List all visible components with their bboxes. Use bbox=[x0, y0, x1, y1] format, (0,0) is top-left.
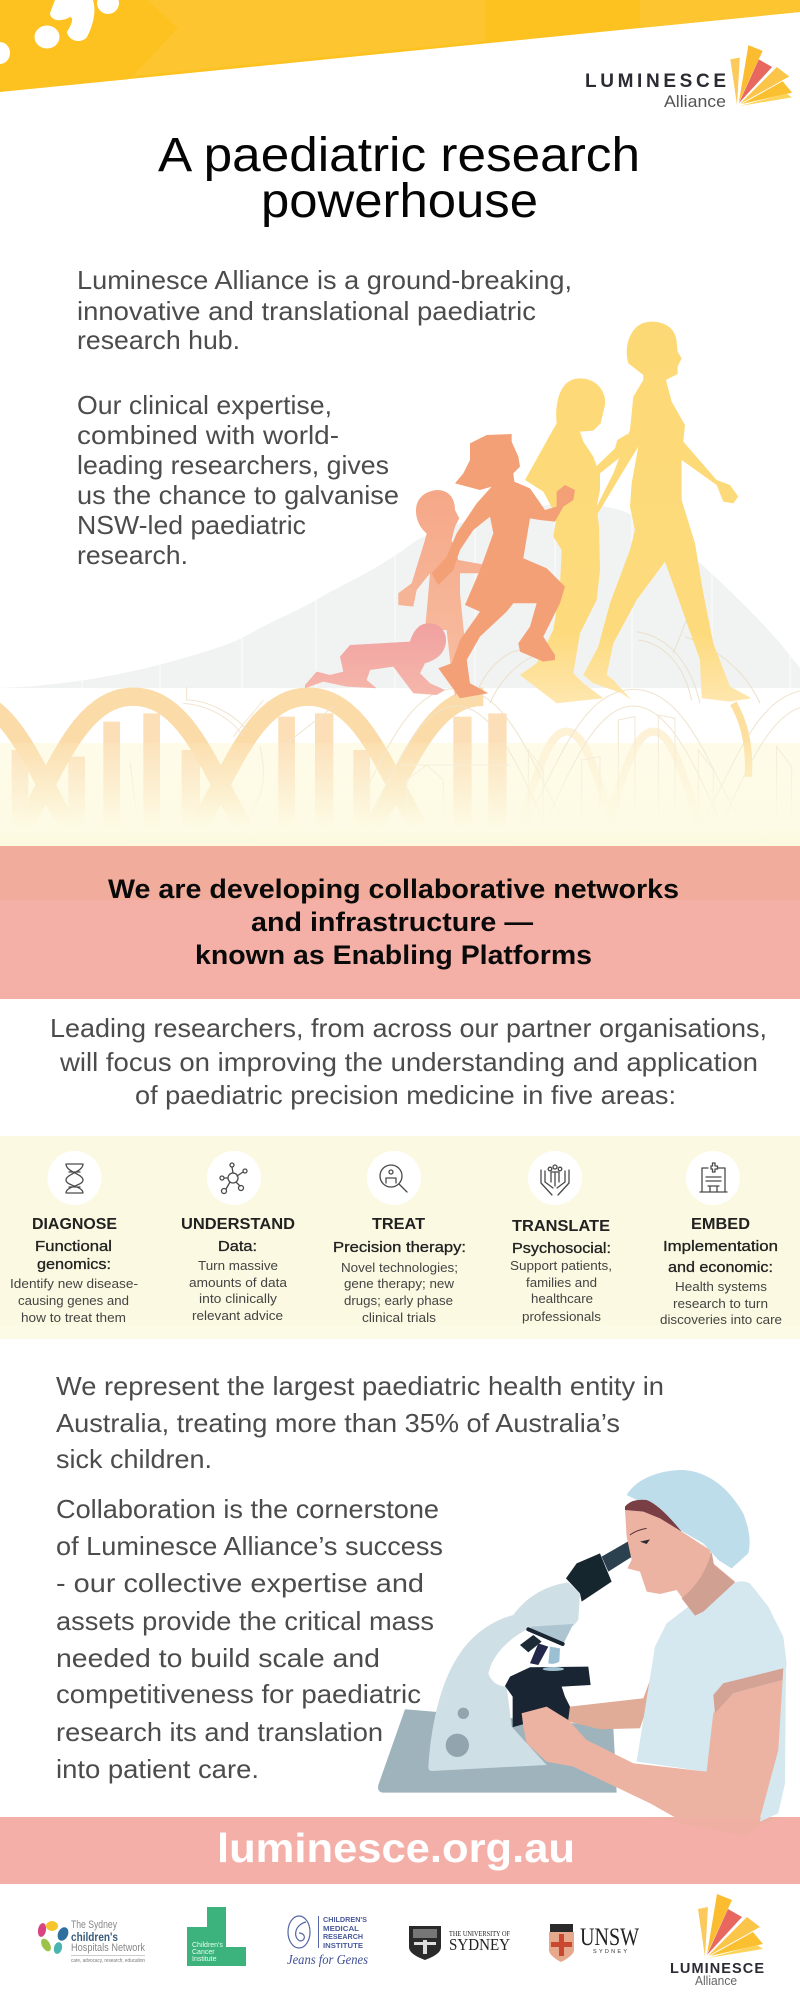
logo: Luminesce Alliance header: Alliance bbox=[664, 92, 726, 111]
panel: five areas bbox=[0, 1136, 800, 1339]
text block: collaboration: of Luminesce Alliance’s success bbox=[56, 1531, 443, 1561]
logo: Children's Medical Research Institute: MEDICAL bbox=[323, 1924, 359, 1933]
column: diagnose: how to treat them bbox=[21, 1311, 126, 1325]
column: treat bbox=[333, 1151, 466, 1325]
icon: hospital bbox=[700, 1163, 727, 1192]
logo: Children's Medical Research Institute: INSTITUTE bbox=[323, 1941, 363, 1950]
grey bell curve bbox=[0, 500, 800, 688]
column: embed: EMBED bbox=[691, 1216, 750, 1233]
logo: Children's Medical Research Institute: CHILDREN'S bbox=[323, 1915, 367, 1924]
column: diagnose: Identify new disease- bbox=[10, 1277, 138, 1291]
column: understand: amounts of data bbox=[189, 1276, 287, 1290]
panel: enabling platforms heading bbox=[0, 846, 800, 999]
text block: largest paediatric entity bbox=[56, 1371, 664, 1474]
text block: intro paragraph: Luminesce Alliance is a ground-breaking, bbox=[77, 265, 572, 295]
logo: Sydney Children's Hospitals Network: children's bbox=[71, 1930, 118, 1944]
column: translate: Psychosocial: bbox=[512, 1241, 611, 1257]
column: translate: professionals bbox=[522, 1310, 601, 1324]
column: treat: drugs; early phase bbox=[344, 1294, 453, 1308]
logo: Children's Cancer Institute: Institute bbox=[192, 1956, 217, 1963]
text block: largest paediatric entity: Australia, treating more than 35% of Australia’s bbox=[56, 1408, 620, 1438]
logo: University of Sydney bbox=[409, 1926, 510, 1960]
logo: Children's Cancer Institute: Cancer bbox=[192, 1949, 215, 1956]
column: diagnose: DIAGNOSE bbox=[32, 1216, 117, 1233]
column: treat: TREAT bbox=[372, 1216, 425, 1233]
head bbox=[625, 1510, 735, 1616]
text block: clinical expertise: combined with world- bbox=[77, 420, 339, 450]
figure: small child bbox=[398, 490, 495, 697]
logo: Sydney Children's Hospitals Network bbox=[37, 1919, 145, 1964]
column: diagnose: causing genes and bbox=[18, 1294, 129, 1308]
text block: clinical expertise: Our clinical expertise, bbox=[77, 390, 332, 420]
heading text: We are developing collaborative networks bbox=[108, 874, 679, 904]
text block: collaboration: Collaboration is the cornerstone bbox=[56, 1494, 439, 1524]
column: understand: relevant advice bbox=[192, 1309, 283, 1323]
figure: crawling baby bbox=[305, 623, 446, 695]
column: embed: discoveries into care bbox=[660, 1313, 782, 1327]
logo: Sydney Children's Hospitals Network: Hospitals Network bbox=[71, 1942, 145, 1954]
text block: clinical expertise: leading researchers, gives bbox=[77, 450, 389, 480]
top banner bbox=[0, 0, 800, 92]
icon: network bbox=[220, 1163, 247, 1194]
illustration: helix background and figures bbox=[0, 322, 800, 846]
shirt bbox=[637, 1581, 787, 1773]
heading text: and infrastructure — bbox=[251, 907, 533, 937]
column: translate: healthcare bbox=[531, 1292, 593, 1306]
icon: hands and people bbox=[541, 1165, 569, 1195]
text block: collaboration: needed to build scale and bbox=[56, 1643, 380, 1673]
logo: UNSW Sydney: UNSW bbox=[580, 1924, 639, 1951]
column: treat: Novel technologies; bbox=[341, 1261, 458, 1275]
text block: leading researchers bbox=[50, 1013, 767, 1110]
column: embed bbox=[660, 1151, 782, 1327]
title bbox=[158, 129, 640, 228]
logo: Luminesce Alliance footer: LUMINESCE bbox=[670, 1961, 764, 1977]
DNA helix bbox=[0, 687, 507, 827]
heading text bbox=[108, 874, 679, 970]
column: understand: UNDERSTAND bbox=[181, 1216, 295, 1233]
column: embed: Implementation bbox=[663, 1239, 778, 1255]
column: embed: research to turn bbox=[673, 1297, 768, 1311]
microscope body bbox=[428, 1539, 640, 1771]
logo: Children's Medical Research Institute: Jeans for Genes bbox=[287, 1953, 368, 1968]
text block: largest paediatric entity: sick children. bbox=[56, 1444, 212, 1474]
icon: magnifier bbox=[380, 1165, 407, 1192]
far arm bbox=[568, 1667, 655, 1729]
column: treat: Precision therapy: bbox=[333, 1240, 466, 1256]
icon: DNA bbox=[66, 1164, 83, 1193]
column: understand: Data: bbox=[218, 1239, 257, 1255]
logo: University of Sydney: THE UNIVERSITY OF bbox=[449, 1929, 510, 1938]
logo: Luminesce Alliance header bbox=[585, 45, 792, 111]
text block: collaboration bbox=[56, 1494, 443, 1784]
logo: Children's Cancer Institute bbox=[187, 1907, 246, 1966]
logo: Luminesce Alliance footer bbox=[670, 1894, 764, 1988]
logo: UNSW Sydney: SYDNEY bbox=[593, 1949, 627, 1955]
text block: intro paragraph: research hub. bbox=[77, 325, 240, 355]
text block: leading researchers: Leading researchers, from across our partner organisations, bbox=[50, 1013, 767, 1043]
column: understand: Turn massive bbox=[198, 1259, 278, 1273]
column: treat: clinical trials bbox=[362, 1311, 436, 1325]
thin helix outlines bbox=[347, 688, 800, 827]
text block: collaboration: research its and translation bbox=[56, 1717, 383, 1747]
shirt back bbox=[760, 1663, 786, 1822]
logo: Sydney Children's Hospitals Network: The Sydney bbox=[71, 1919, 117, 1931]
text block: clinical expertise: research. bbox=[77, 540, 188, 570]
text block: clinical expertise: NSW-led paediatric bbox=[77, 510, 306, 540]
logo: UNSW Sydney bbox=[549, 1924, 639, 1962]
logo: Luminesce Alliance footer: Alliance bbox=[695, 1973, 737, 1988]
text block: leading researchers: will focus on improving the understanding and application bbox=[59, 1047, 758, 1077]
figure: teenager bbox=[520, 378, 628, 703]
logo: Sydney Children's Hospitals Network: care, advocacy, research, education bbox=[71, 1958, 145, 1964]
call to action band: luminesce.org.au bbox=[217, 1825, 575, 1871]
logo: University of Sydney: SYDNEY bbox=[449, 1935, 510, 1954]
title: powerhouse bbox=[261, 175, 538, 228]
text block: largest paediatric entity: We represent the largest paediatric health entity in bbox=[56, 1371, 664, 1401]
heading text: known as Enabling Platforms bbox=[195, 940, 592, 970]
near arm bbox=[522, 1680, 783, 1818]
desk bbox=[378, 1709, 617, 1793]
text block: collaboration: into patient care. bbox=[56, 1754, 259, 1784]
column: understand: into clinically bbox=[199, 1292, 278, 1306]
column: diagnose bbox=[10, 1151, 138, 1325]
call to action band bbox=[0, 1817, 800, 1884]
text block: intro paragraph bbox=[77, 265, 572, 355]
text block: collaboration: - our collective expertise and bbox=[56, 1568, 424, 1598]
illustration: researcher at microscope bbox=[378, 1470, 787, 1822]
column: diagnose: Functional bbox=[35, 1239, 112, 1255]
figure: running girl bbox=[432, 434, 575, 698]
cap bbox=[627, 1470, 750, 1568]
circuit arcs behind figures bbox=[473, 603, 760, 703]
title: A paediatric research bbox=[158, 129, 640, 182]
column: translate: TRANSLATE bbox=[512, 1218, 610, 1235]
text block: collaboration: competitiveness for paediatric bbox=[56, 1679, 421, 1709]
column: translate: families and bbox=[526, 1276, 597, 1290]
column: translate bbox=[510, 1151, 612, 1324]
figure: woman bbox=[583, 322, 752, 702]
logo: Children's Medical Research Institute: RESEARCH bbox=[323, 1932, 363, 1941]
text block: clinical expertise bbox=[77, 390, 399, 570]
column: translate: Support patients, bbox=[510, 1259, 612, 1273]
logo: Children's Medical Research Institute bbox=[287, 1915, 368, 1968]
column: embed: and economic: bbox=[668, 1260, 773, 1276]
column: diagnose: genomics: bbox=[37, 1257, 111, 1273]
column: treat: gene therapy; new bbox=[344, 1277, 455, 1291]
column: understand bbox=[181, 1151, 295, 1323]
logo: Luminesce Alliance header: LUMINESCE bbox=[585, 71, 726, 92]
text block: intro paragraph: innovative and translational paediatric bbox=[77, 296, 536, 326]
text block: leading researchers: of paediatric precision medicine in five areas: bbox=[135, 1080, 676, 1110]
column: embed: Health systems bbox=[675, 1280, 767, 1294]
text block: clinical expertise: us the chance to galvanise bbox=[77, 480, 399, 510]
text block: collaboration: assets provide the critical mass bbox=[56, 1606, 434, 1636]
logo: Children's Cancer Institute: Children's bbox=[192, 1942, 223, 1949]
